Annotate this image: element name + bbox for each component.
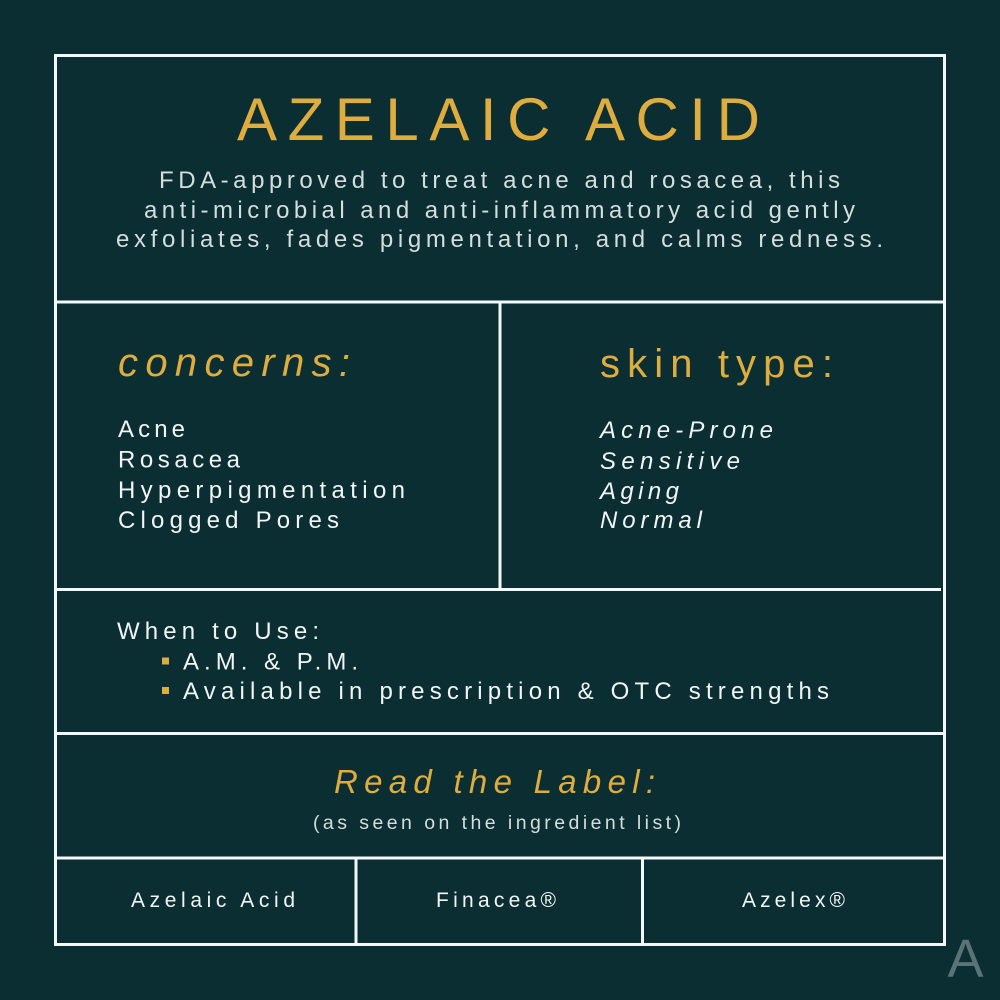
concerns list: Clogged Pores	[118, 507, 339, 534]
panel: concerns	[118, 341, 405, 534]
concerns heading: concerns:	[118, 341, 350, 385]
panel: header	[116, 86, 883, 253]
bullet: A.M. and P.M.: A.M. & P.M.	[183, 648, 358, 676]
concerns list: Acne	[118, 416, 185, 443]
name: Finacea: Finacea®	[436, 889, 557, 912]
skin type list	[598, 417, 773, 534]
title: AZELAIC ACID	[237, 86, 760, 153]
skin type list: Acne-Prone	[598, 417, 773, 444]
panel: when to use	[117, 618, 829, 705]
description: FDA-approved to treat acne and rosacea, this	[159, 167, 840, 194]
bullet: availability: Available in prescription & OTC strengths	[183, 678, 829, 705]
description	[116, 167, 883, 253]
skin type list: Aging	[598, 478, 680, 505]
table frame and dividers	[55, 56, 945, 945]
skin type heading: skin type:	[600, 342, 833, 386]
concerns list	[118, 416, 405, 534]
description: exfoliates, fades pigmentation, and calms redness.	[116, 226, 883, 253]
skin type list: Sensitive	[600, 448, 740, 475]
concerns list: Rosacea	[118, 446, 241, 474]
read the label subtext: (as seen on the ingredient list)	[313, 812, 681, 834]
name: Azelaic Acid: Azelaic Acid	[131, 889, 295, 912]
description: anti-microbial and anti-inflammatory acid gently	[144, 197, 855, 224]
when to use heading: When to Use:	[117, 618, 319, 645]
panel: skin type	[598, 342, 833, 534]
name: Azelex: Azelex®	[742, 889, 846, 912]
read the label heading: Read the Label:	[334, 763, 655, 800]
skin type list: Normal	[600, 507, 703, 534]
panel: read the label	[313, 763, 681, 834]
watermark logo letter: A	[948, 929, 984, 989]
concerns list: Hyperpigmentation	[118, 477, 405, 504]
panel: ingredient names	[131, 889, 846, 912]
